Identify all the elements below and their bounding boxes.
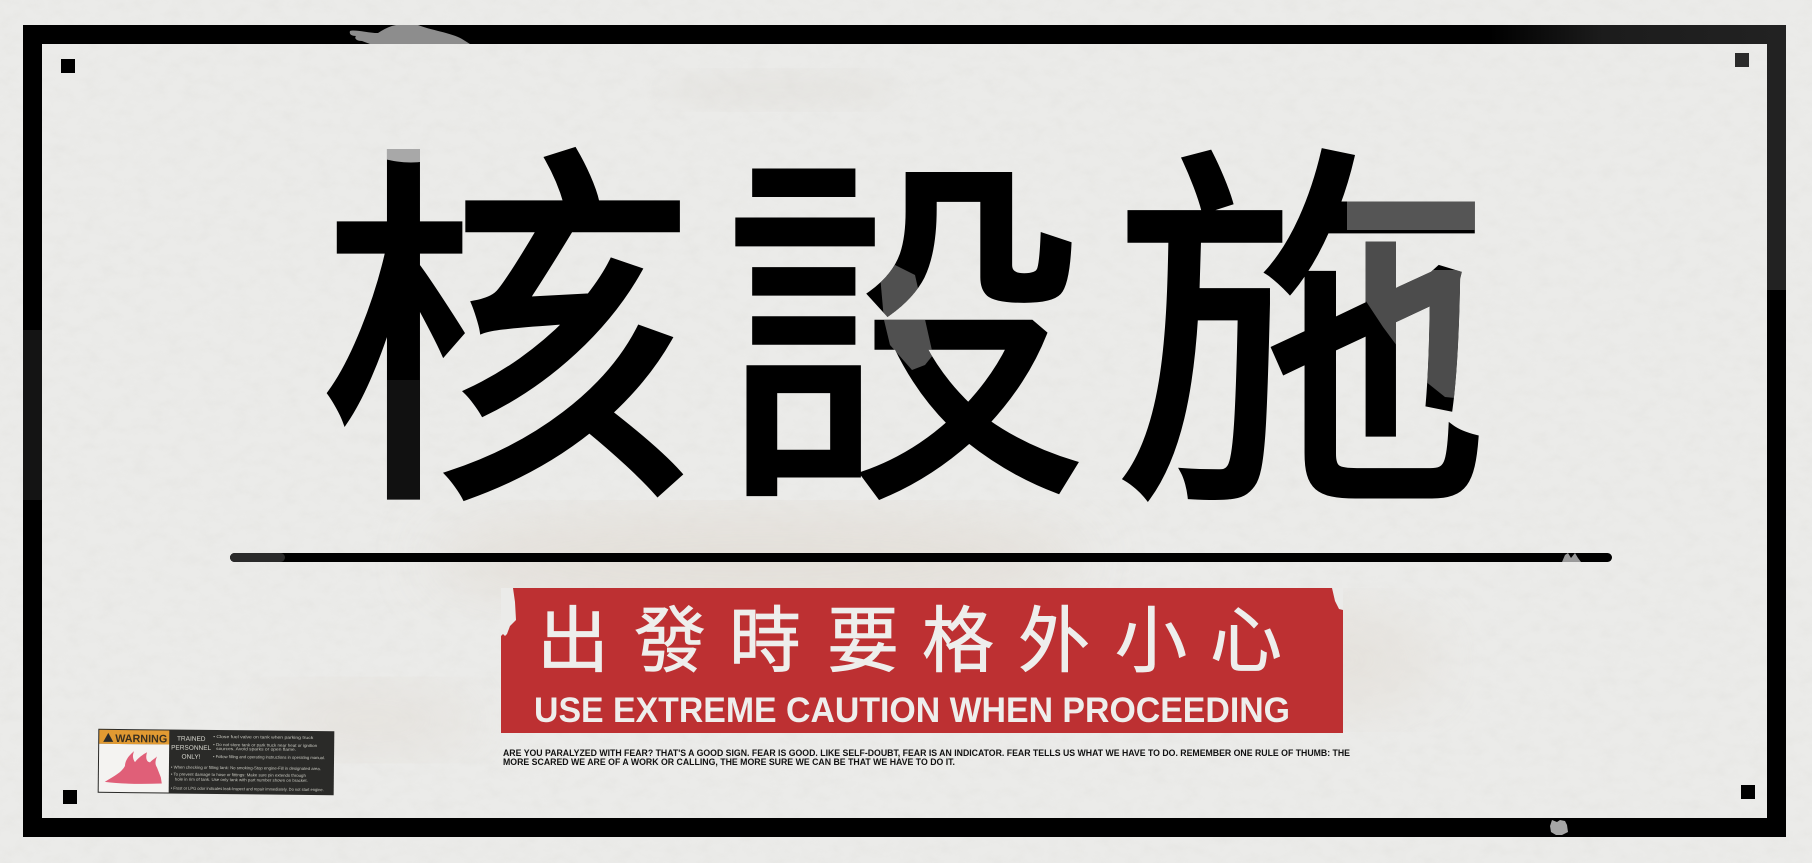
corner square: top left — [61, 59, 75, 73]
chinese caution text: 要 — [827, 582, 899, 687]
frame wear: left side — [23, 330, 42, 500]
corner square: top right — [1735, 53, 1749, 67]
sticker instructions: • Follow filling and operating instructions in operating manual. — [213, 754, 325, 760]
banner wear: torn left edge — [501, 588, 516, 636]
banner wear: torn right edge — [1332, 588, 1343, 610]
title — [318, 129, 1492, 547]
trained personnel text: ONLY! — [181, 754, 201, 761]
chinese caution text: 時 — [729, 582, 801, 687]
title: 設 — [718, 138, 1093, 513]
frame wear: dark grey right top — [1330, 25, 1786, 290]
title: 核 — [318, 129, 693, 547]
fine print paragraph — [503, 748, 1351, 768]
sticker instructions: • Close fuel valve on tank when parking truck — [213, 734, 314, 740]
fine print paragraph: ARE YOU PARALYZED WITH FEAR? THAT'S A GOOD SIGN. FEAR IS GOOD. LIKE SELF-DOUBT, FEAR IS AN INDICATOR. FEAR TELLS US WHAT WE HAVE TO DO. REMEMBER ONE RULE OF THUMB: THE — [503, 748, 1351, 759]
divider rule — [230, 553, 1612, 562]
red caution banner — [501, 582, 1343, 733]
chinese caution text: 外 — [1018, 582, 1090, 687]
sticker instructions: • To prevent damage to hose or fittings: Make sure pin extends through — [171, 772, 307, 778]
corner square: bottom right — [1741, 785, 1755, 799]
chinese caution text: 心 — [1210, 582, 1282, 687]
corner square: bottom left — [63, 790, 77, 804]
warning triangle icon — [103, 733, 113, 742]
warning header — [99, 730, 169, 745]
trained personnel text: TRAINED — [177, 736, 206, 743]
rule wear: chips — [1562, 553, 1581, 562]
sticker instructions: • Frost or LPG odor indicates leak-Inspect and repair immediately. Do not start engine. — [171, 786, 324, 792]
sticker instructions: sources. Avoid sparks or open flame. — [216, 746, 296, 752]
english caution text: USE EXTREME CAUTION WHEN PROCEEDING — [534, 691, 1290, 730]
sticker instructions: hole in rim of tank. Use only tank with part number shown on bracket. — [175, 777, 308, 783]
sticker instructions: • Do not store tank or park truck near heat or ignition — [213, 742, 318, 748]
rule wear: lighter left end — [230, 553, 285, 562]
warning sticker — [98, 729, 334, 795]
title wear: grey patches showing on the black strokes — [385, 143, 1492, 510]
sticker instructions: • When checking or filling tank: No smoking-Stop engine-Fill in designated area. — [171, 765, 321, 771]
fine print paragraph: MORE SCARED WE ARE OF A WORK OR CALLING, THE MORE SURE WE CAN BE THAT WE HAVE TO DO IT. — [503, 757, 955, 768]
frame wear: speckles at bottom right — [1550, 820, 1568, 835]
flame panel — [99, 744, 169, 793]
warning sticker: WARNING — [115, 733, 167, 745]
trained personnel text: PERSONNEL — [171, 745, 212, 752]
chinese caution text: 小 — [1115, 582, 1187, 687]
frame wear: grey smudge on top edge — [350, 25, 470, 44]
icon: flame — [105, 751, 162, 784]
title: 施 — [1114, 147, 1489, 522]
chinese caution text: 發 — [634, 582, 706, 687]
chinese caution text: 格 — [922, 582, 994, 687]
chinese caution text: 出 — [537, 582, 609, 687]
sticker instructions — [171, 734, 325, 792]
